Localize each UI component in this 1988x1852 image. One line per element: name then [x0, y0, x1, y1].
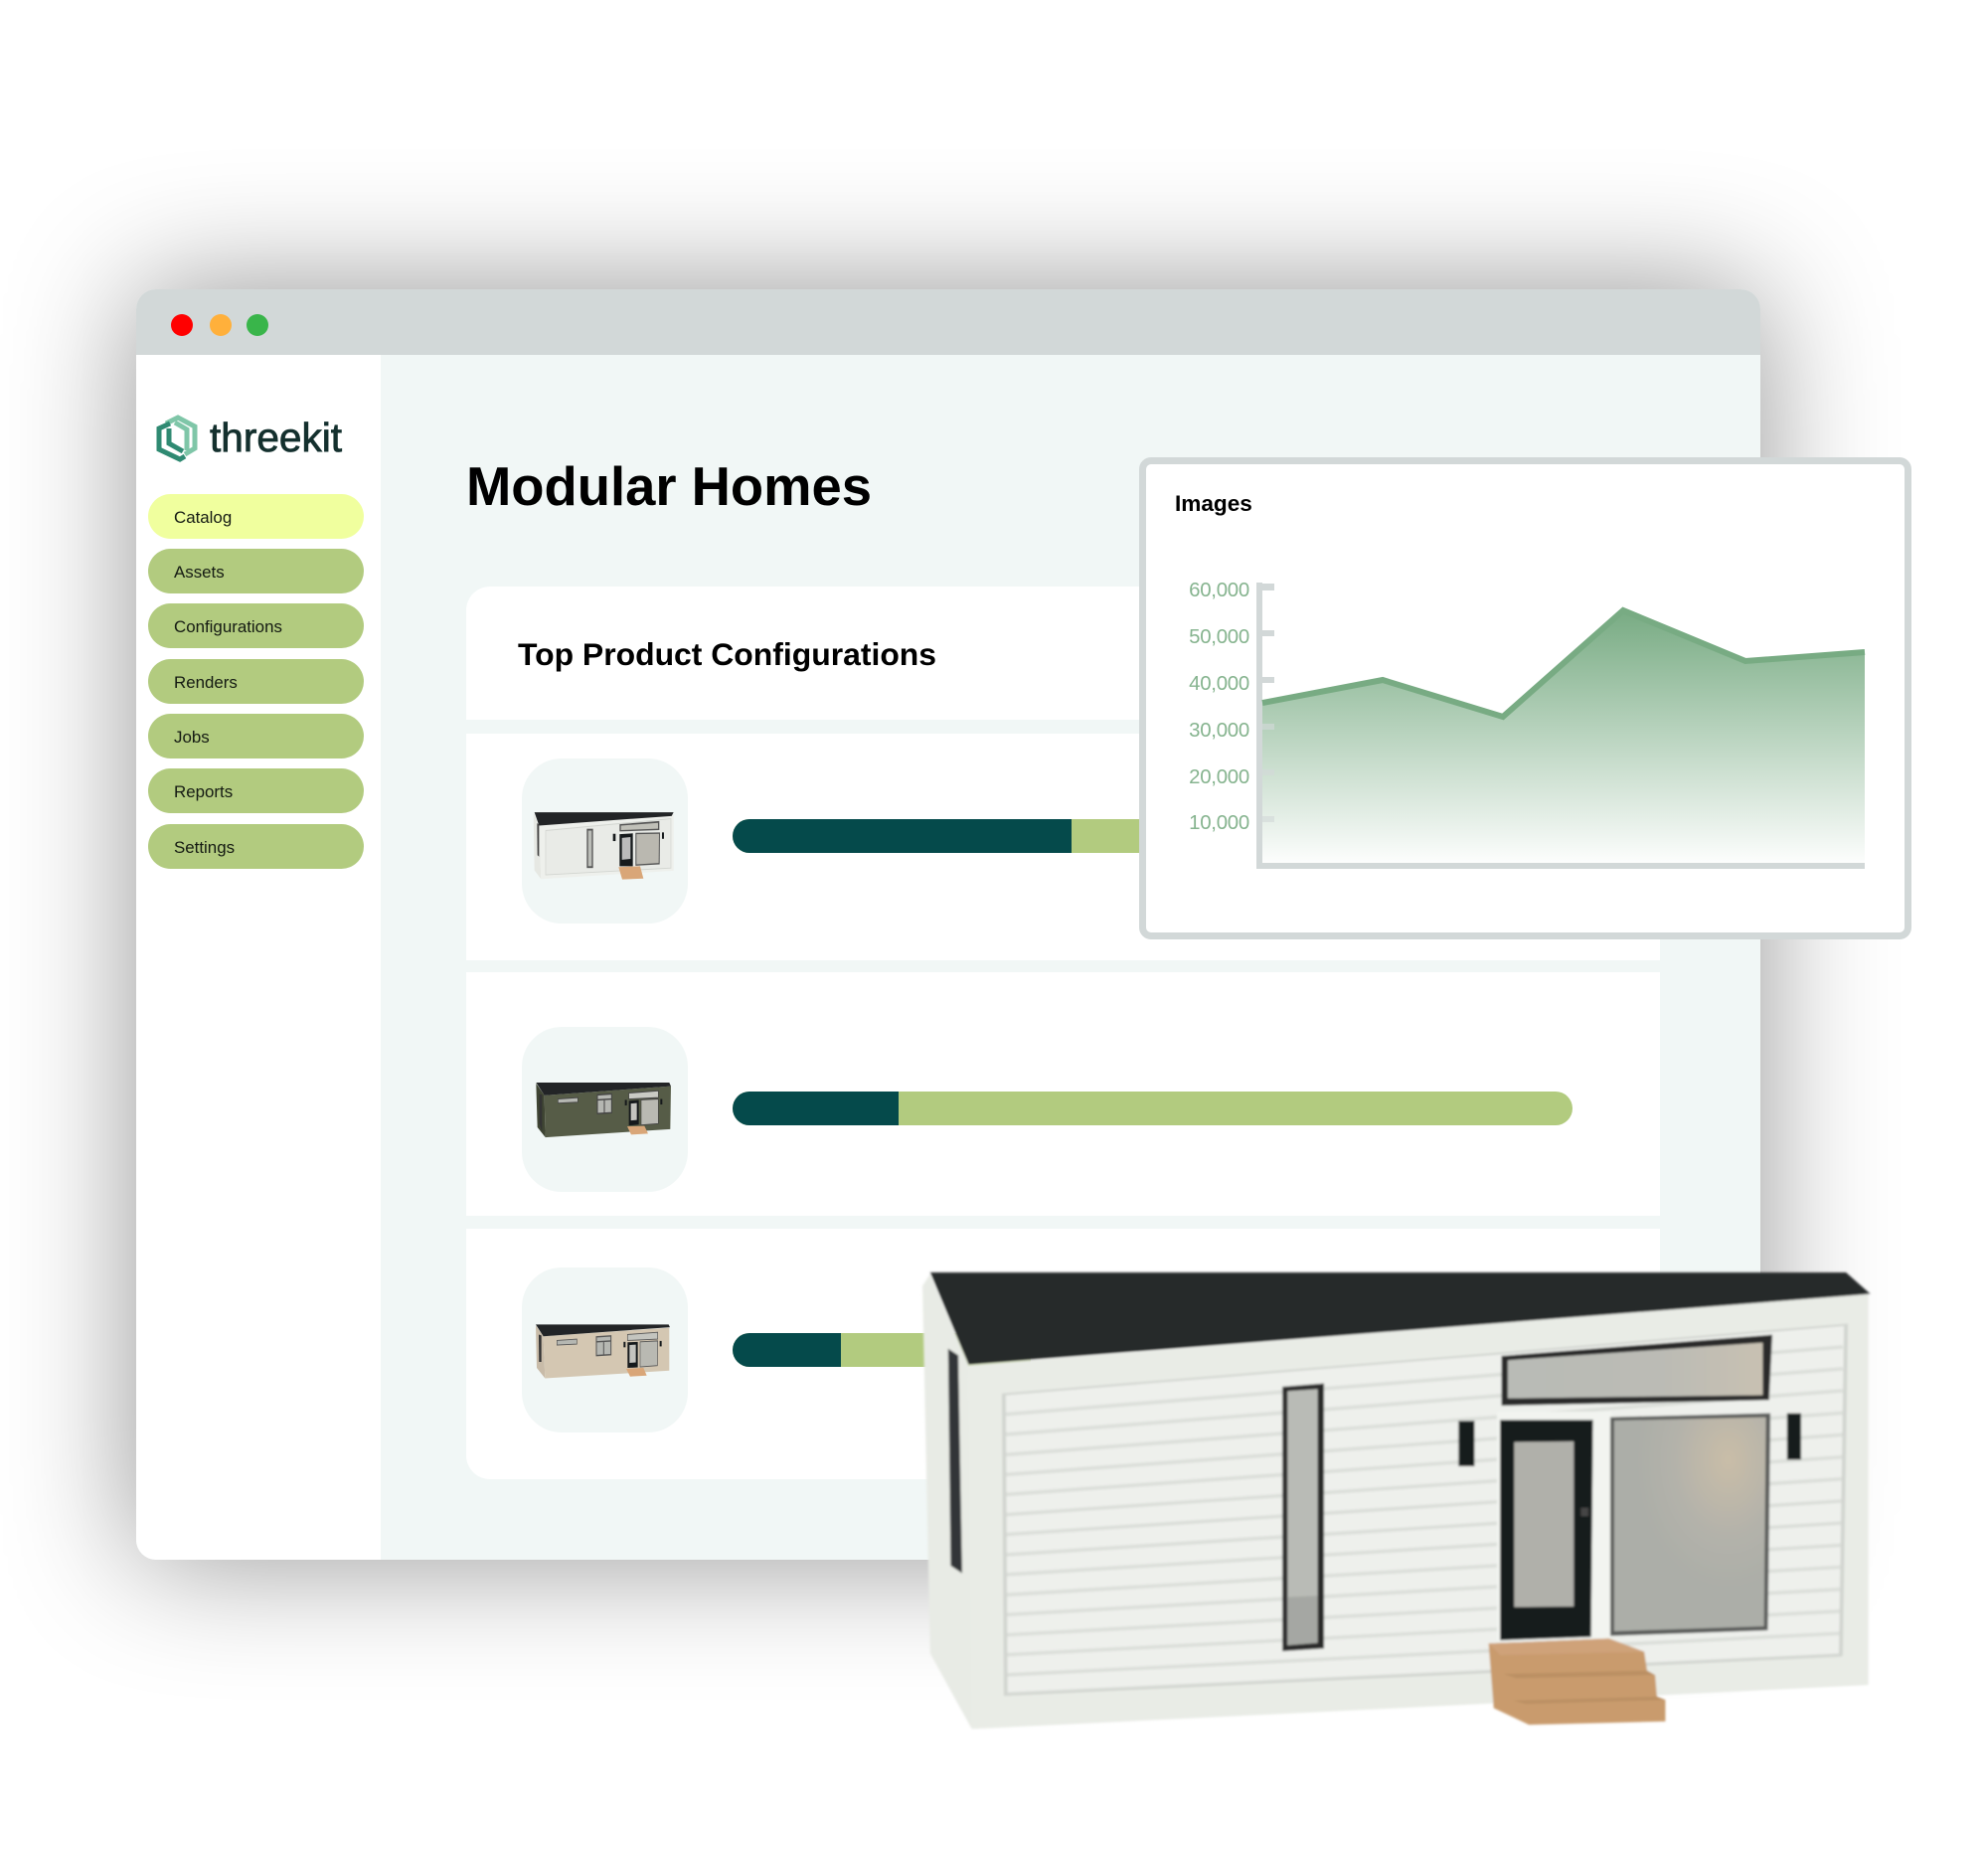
window control: orange: [210, 314, 232, 336]
nav item: Jobs: [148, 714, 364, 758]
icon: white house thumbnail: [533, 812, 674, 880]
y axis labels: [1189, 580, 1249, 834]
chart heading: Images: [1175, 491, 1252, 516]
nav item: Renders: [148, 659, 364, 704]
nav item: Settings: [148, 824, 364, 869]
thumbnail tile 1: [521, 758, 688, 924]
icon: green house thumbnail: [536, 1083, 671, 1137]
heading: Top Product Configurations: [518, 636, 936, 672]
window control: red: [171, 314, 193, 336]
nav item: Settings: Settings: [174, 838, 235, 857]
label 30,000: 30,000: [1189, 720, 1249, 742]
bar 2: [733, 1092, 1573, 1125]
nav item: Reports: [148, 768, 364, 813]
browser window: [136, 289, 1760, 1560]
nav item: Renders: Renders: [174, 673, 238, 692]
label 20,000: 20,000: [1189, 766, 1249, 788]
nav item: Assets: Assets: [174, 563, 225, 582]
nav item: Jobs: Jobs: [174, 728, 210, 747]
panel: row 3: [466, 1229, 1660, 1479]
logo: threekit: [157, 415, 342, 462]
nav item: Configurations: [148, 603, 364, 648]
window control: green: [247, 314, 268, 336]
panel: top product configurations header: [466, 587, 1660, 720]
nav item: Reports: Reports: [174, 782, 233, 801]
thumbnail tile 2: [521, 1027, 688, 1192]
nav item: Catalog: [148, 494, 364, 539]
panel: images chart: [1139, 457, 1911, 939]
logo wordmark: threekit: [210, 415, 342, 460]
icon: logo mark: [157, 415, 197, 462]
icon: large white modular home: [922, 1270, 1871, 1730]
label 10,000: 10,000: [1189, 812, 1249, 834]
panel: row 2: [466, 972, 1660, 1216]
label 40,000: 40,000: [1189, 673, 1249, 695]
bar 3: [733, 1333, 1031, 1367]
panel: row 1: [466, 734, 1660, 960]
nav item: Catalog: Catalog: [174, 508, 232, 527]
nav item: Configurations: Configurations: [174, 617, 282, 636]
label 50,000: 50,000: [1189, 626, 1249, 648]
icon: tan house thumbnail: [536, 1324, 670, 1378]
sidebar navigation: [148, 494, 364, 869]
title bar: [136, 289, 1760, 355]
label 60,000: 60,000: [1189, 580, 1249, 601]
bar 1: [733, 819, 1230, 853]
area chart: [1189, 580, 1865, 869]
nav item: Assets: [148, 549, 364, 593]
thumbnail tile 3: [521, 1267, 688, 1432]
chart plot: [1256, 583, 1865, 869]
sidebar background: [136, 355, 381, 1560]
title: Modular Homes: [466, 456, 872, 517]
